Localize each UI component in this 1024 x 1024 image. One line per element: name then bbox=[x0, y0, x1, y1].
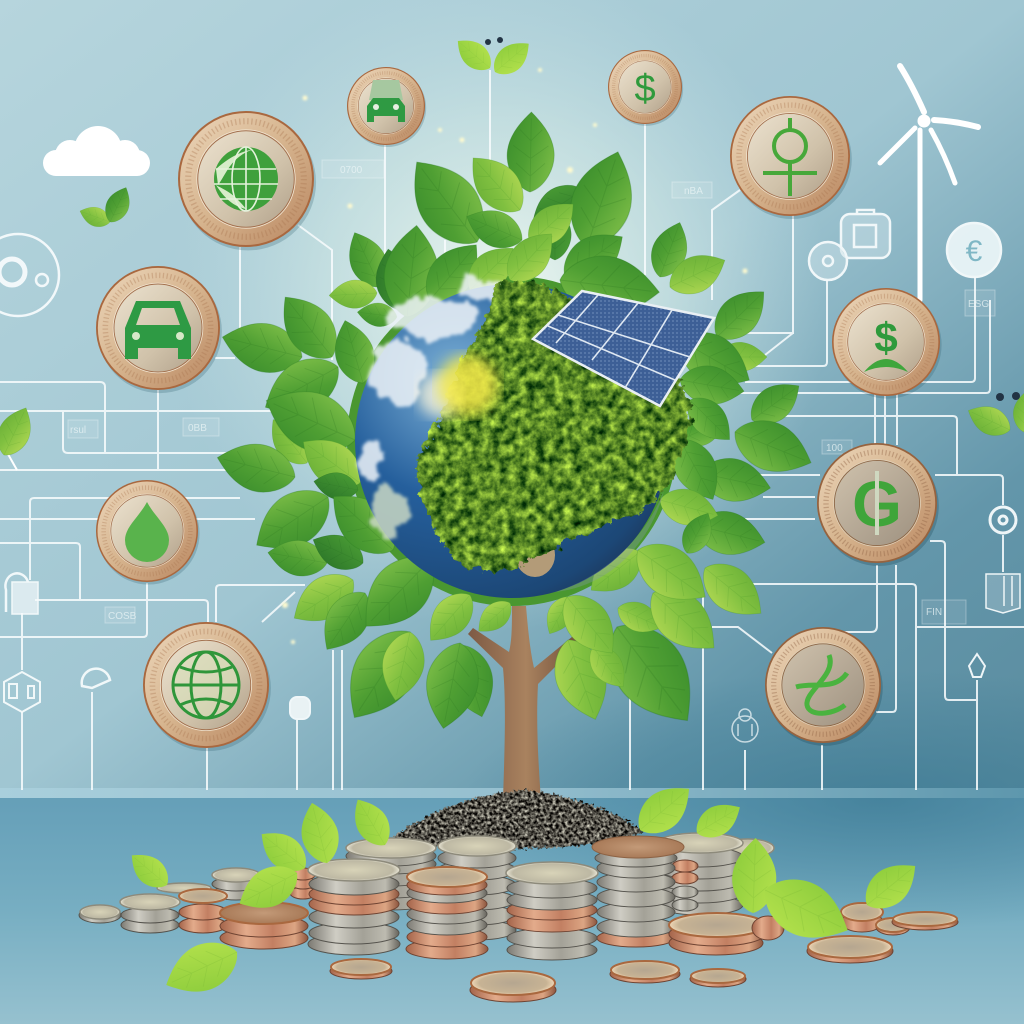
stack: silver front left bbox=[308, 859, 400, 955]
small leaves: by cloud bbox=[77, 183, 136, 231]
icon: currency circle bbox=[947, 223, 1001, 277]
foliage on globe bbox=[417, 281, 691, 570]
stack: copper wide bbox=[220, 902, 308, 949]
icon: dollar: $ bbox=[634, 68, 656, 110]
wall skirting bbox=[0, 788, 1024, 798]
stack: rear right bbox=[722, 839, 774, 883]
stack: copper insert bbox=[672, 860, 698, 911]
lower globe shading bbox=[555, 490, 664, 592]
coin: water drop bbox=[96, 480, 200, 585]
coin: dollar small bbox=[608, 50, 683, 126]
ground leaves bbox=[123, 774, 927, 1006]
faint labels: nBA bbox=[684, 186, 703, 197]
faint labels: COSB bbox=[108, 611, 137, 622]
stack: copper front right bbox=[669, 913, 765, 955]
tree leaves bbox=[212, 112, 820, 741]
icon: dollar plant: $ bbox=[874, 314, 898, 361]
icon: bulb bbox=[969, 654, 985, 677]
solar panel bbox=[533, 291, 714, 406]
icon: lock bbox=[5, 573, 38, 614]
icon: wind turbine bbox=[880, 66, 978, 300]
flat rear coin bbox=[157, 883, 211, 893]
icon: briefcase right bbox=[841, 210, 890, 258]
icon: symbol bbox=[763, 118, 817, 196]
icon: car bbox=[367, 80, 405, 122]
icon: plug bbox=[290, 697, 310, 719]
icon: car bbox=[125, 301, 191, 359]
clouds bbox=[358, 280, 504, 540]
icon: disc bbox=[809, 242, 847, 280]
icon: sprout bbox=[796, 655, 847, 713]
coin: dollar plant bbox=[832, 288, 942, 399]
stack: copper right bbox=[841, 903, 883, 932]
background glow bbox=[170, 0, 830, 630]
globe bbox=[355, 280, 691, 598]
foliage backing bbox=[347, 276, 677, 606]
stack: copper small bbox=[179, 889, 227, 933]
coin stacks bbox=[79, 833, 958, 1002]
icon: globe bbox=[173, 652, 239, 718]
flat silver coin bbox=[79, 905, 121, 923]
stack: rear silver bbox=[212, 868, 260, 900]
stack: small silver bbox=[120, 894, 180, 933]
floor bbox=[0, 797, 1024, 1024]
icon: seal bbox=[732, 709, 758, 742]
icon: arc bbox=[82, 669, 110, 688]
coin: currency G bbox=[817, 443, 939, 566]
stack: rear centre bbox=[438, 836, 516, 940]
flat coins bbox=[876, 918, 910, 935]
coin: globe large bbox=[178, 111, 316, 250]
icon: hexagon bbox=[4, 672, 40, 712]
icon: gear circle left bbox=[0, 234, 59, 316]
faint labels: 0BB bbox=[188, 423, 207, 434]
land patch bbox=[515, 533, 555, 577]
coin: car small bbox=[347, 67, 426, 147]
faint labels: FIN bbox=[926, 607, 942, 618]
faint labels: 100 bbox=[826, 443, 843, 454]
soil mound bbox=[392, 790, 643, 849]
faint labels: rsul bbox=[70, 425, 86, 436]
stack: rear middle right bbox=[657, 833, 743, 915]
tree trunk bbox=[468, 606, 584, 800]
coin: globe lower bbox=[143, 622, 271, 751]
stack: mixed front bbox=[406, 867, 488, 959]
small line-art icons bbox=[0, 210, 1020, 742]
icon: currency G: G bbox=[852, 468, 902, 540]
icon: box bbox=[986, 574, 1020, 613]
faint labels: 0700 bbox=[340, 165, 363, 176]
icon: globe bbox=[214, 147, 278, 211]
sun glare bbox=[418, 355, 498, 417]
rear stacks bbox=[346, 838, 436, 910]
coin: energy symbol bbox=[730, 96, 852, 219]
faint labels bbox=[68, 160, 995, 624]
coin behind leaf bbox=[752, 916, 784, 940]
cloud bbox=[43, 126, 150, 176]
small leaf: left edge bbox=[0, 401, 40, 470]
icon: water drop bbox=[125, 502, 169, 562]
icon: ring bbox=[990, 507, 1016, 533]
coin: sprout bbox=[765, 627, 883, 746]
floor shade right bbox=[460, 670, 1024, 930]
icon: currency circle: € bbox=[966, 235, 983, 268]
faint labels: ESG bbox=[968, 299, 989, 310]
stack: copper behind bbox=[290, 868, 316, 899]
circuit lines bbox=[0, 70, 1024, 790]
background wall bbox=[0, 0, 1024, 790]
small leaves: top bbox=[450, 32, 537, 82]
coin: car large bbox=[96, 266, 222, 393]
stack: dark with copper top bbox=[592, 836, 684, 947]
stack: silver front bbox=[506, 862, 598, 960]
sparkles bbox=[282, 68, 748, 644]
small leaves: right edge bbox=[963, 389, 1024, 442]
